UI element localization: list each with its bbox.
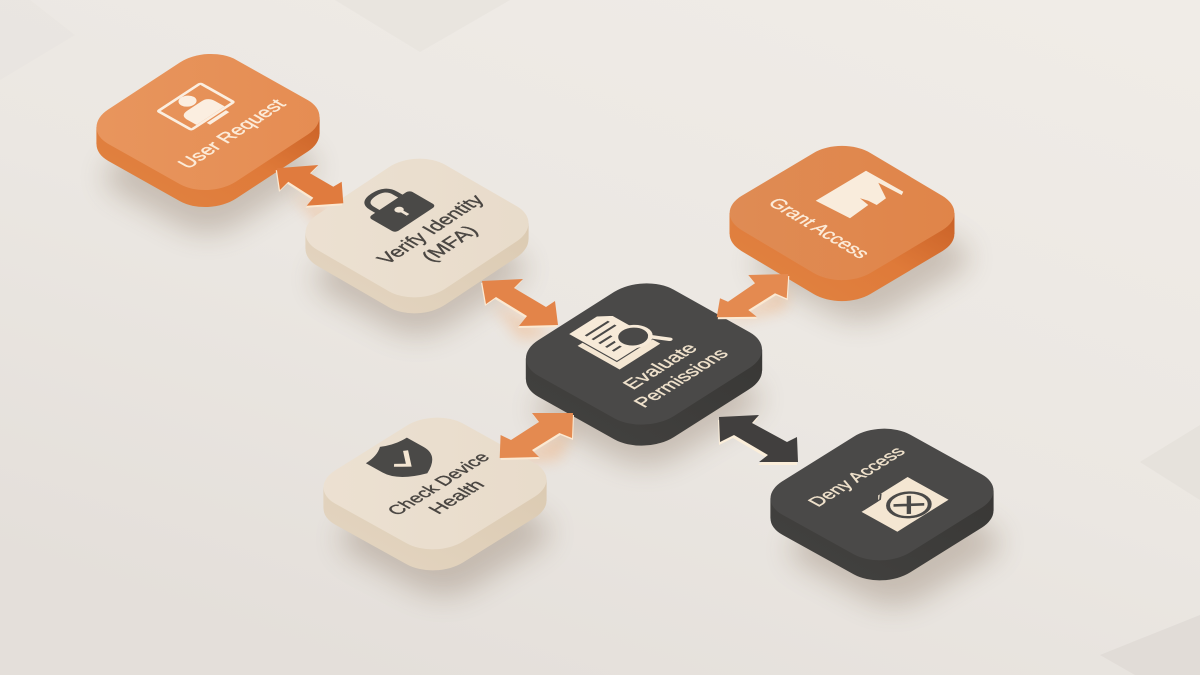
arrow: Evaluate Permissions to Grant Access (717, 274, 789, 319)
icon: folder with cross (856, 477, 949, 532)
label: Grant Access: Grant Access (763, 195, 875, 262)
arrow glows (290, 190, 790, 465)
arrow: Evaluate Permissions to Deny Access (718, 415, 798, 465)
arrow: Check Device Health to Evaluate Permissions (500, 413, 574, 460)
card: Evaluate Permissions (508, 273, 780, 456)
card: Verify Identity (MFA) (289, 148, 545, 324)
label: User Request: User Request (174, 96, 291, 172)
label: Check Device Health: Health (424, 477, 490, 517)
label: Verify Identity (MFA): Verify Identity (372, 191, 490, 267)
label: Evaluate Permissions: Permissions (629, 346, 734, 411)
label: Verify Identity (MFA): (MFA) (416, 222, 483, 265)
label: Check Device Health: Check Device (383, 450, 495, 519)
icon: open door (816, 171, 903, 218)
card: Check Device Health (307, 408, 563, 580)
icon: user at monitor (158, 83, 239, 133)
card: User Request (80, 44, 336, 217)
arrow: Verify Identity to Evaluate Permissions (481, 279, 558, 328)
card: Deny Access (754, 419, 1010, 590)
icon: shield with check (359, 434, 448, 486)
card shadows (90, 102, 1015, 614)
icon: padlock (353, 181, 436, 233)
label: Evaluate Permissions: Evaluate (618, 340, 703, 393)
icon: document and magnifier (563, 307, 670, 370)
card: Grant Access (713, 136, 971, 311)
arrow: User Request to Verify Identity (276, 165, 343, 208)
label: Deny Access: Deny Access (804, 444, 911, 510)
